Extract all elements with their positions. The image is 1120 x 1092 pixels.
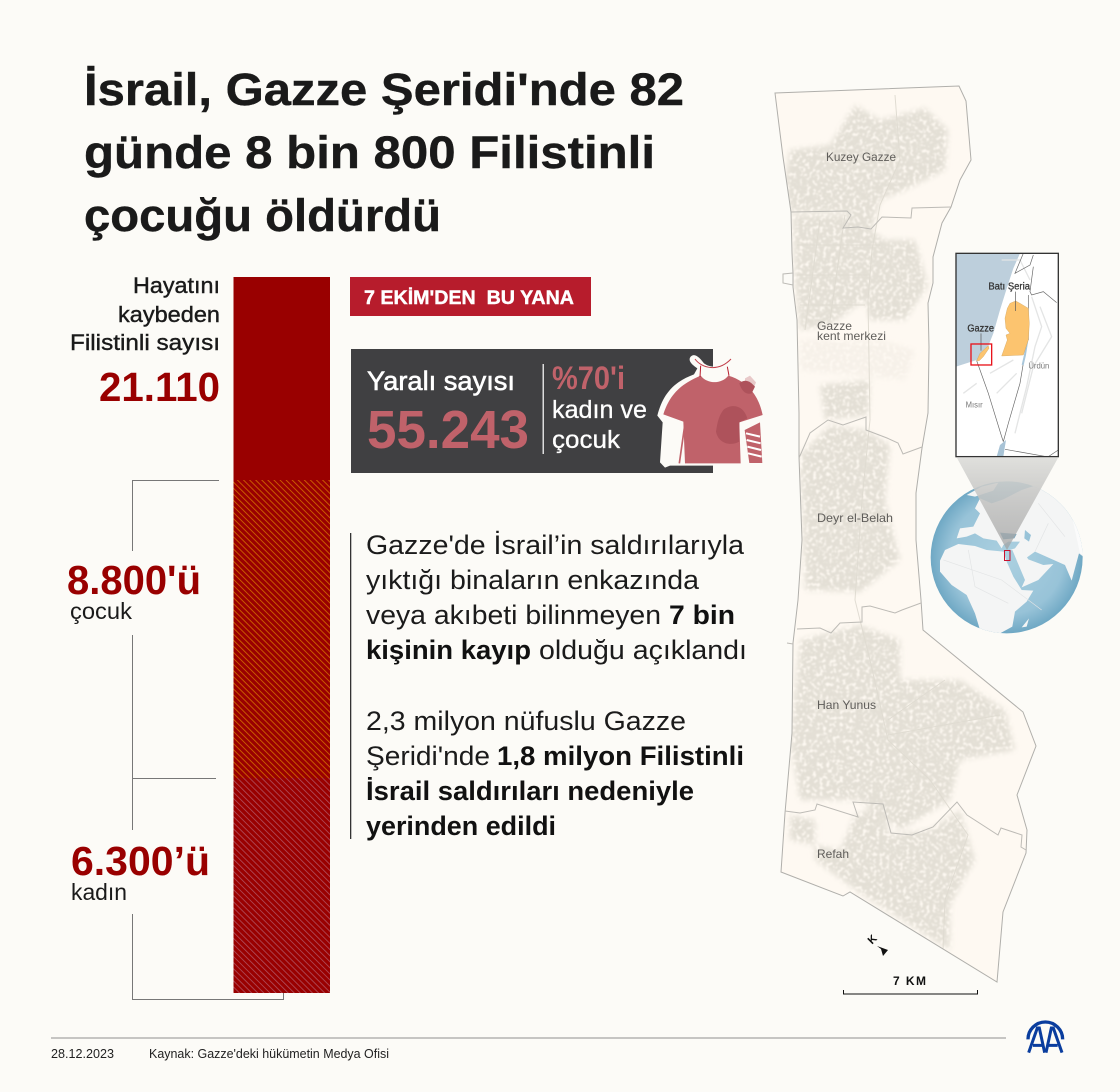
map: Gaza Strip: Han Yunus (817, 698, 876, 712)
children count (67, 557, 201, 624)
footer: 28.12.2023 (51, 1047, 114, 1061)
text block: missing and displaced: 1,8 milyon Filistinli (497, 741, 744, 771)
zoom cone (957, 458, 1058, 550)
icon: north arrow: K (866, 933, 880, 947)
icon: AA logo (1028, 1022, 1063, 1053)
map: Gaza Strip (775, 86, 1036, 982)
title: günde 8 bin 800 Filistinli (84, 127, 655, 178)
scale bar (844, 974, 978, 994)
women count: 6.300’ü (71, 838, 210, 884)
text block: missing and displaced: 7 bin (669, 600, 735, 630)
title (84, 64, 684, 241)
stacked bar chart (234, 277, 330, 993)
panel: wounded (351, 349, 713, 473)
bracket lines (132, 480, 284, 1000)
icon: bloodied shirt (657, 355, 765, 468)
children count: 8.800'ü (67, 557, 201, 603)
text block: missing and displaced (350, 529, 747, 841)
panel: wounded: Yaralı sayısı (367, 366, 515, 396)
inset map: Ürdün (1028, 360, 1049, 370)
text block: missing and displaced: yıktığı binaların enkazında (366, 565, 700, 595)
title: çocuğu öldürdü (84, 190, 441, 241)
map: Gaza Strip: Refah (817, 847, 849, 861)
women count (71, 838, 210, 905)
icon: north arrow (866, 933, 888, 956)
panel: wounded: %70'i (552, 360, 625, 396)
total deaths label: Hayatını (133, 273, 220, 298)
inset map (956, 253, 1058, 457)
inset map: Batı Şeria (988, 281, 1030, 292)
inset map: Gazze (967, 324, 994, 335)
map: Gaza Strip: Kuzey Gazze (826, 150, 896, 164)
text block: missing and displaced: yerinden edildi (366, 811, 556, 841)
panel: wounded: çocuk (552, 426, 621, 454)
text block: missing and displaced: Şeridi'nde (366, 741, 490, 771)
total deaths label (70, 273, 220, 355)
children count: çocuk (70, 598, 133, 624)
footer (51, 1038, 1006, 1061)
badge: since 7 October: 7 EKİM'DEN BU YANA (364, 288, 574, 309)
globe locator (931, 481, 1092, 633)
women count: kadın (71, 879, 127, 905)
footer: Kaynak: Gazze'deki hükümetin Medya Ofisi (149, 1047, 389, 1061)
badge: since 7 October (350, 277, 591, 316)
panel: wounded: kadın ve (552, 396, 647, 424)
scale bar: 7 KM (893, 974, 926, 988)
text block: missing and displaced: kişinin kayıp (366, 635, 531, 665)
total deaths label: kaybeden (118, 302, 220, 327)
map: Gaza Strip: kent merkezi (817, 329, 886, 343)
map: Gaza Strip: Deyr el-Belah (817, 511, 893, 525)
text block: missing and displaced: veya akıbeti bilinmeyen (366, 600, 661, 630)
map: Gaza Strip: Gazze (817, 319, 852, 333)
total deaths label: Filistinli sayısı (70, 330, 220, 355)
total deaths number: 21.110 (99, 364, 220, 410)
text block: missing and displaced: Gazze'de İsrail’in saldırılarıyla (366, 529, 745, 560)
icon: globe red marker (1004, 550, 1010, 560)
text block: missing and displaced: olduğu açıklandı (539, 635, 747, 665)
text block: missing and displaced: İsrail saldırıları nedeniyle (366, 776, 694, 806)
text block: missing and displaced: 2,3 milyon nüfuslu Gazze (366, 706, 686, 736)
panel: wounded: 55.243 (367, 400, 529, 460)
inset map: Mısır (966, 400, 983, 410)
title: İsrail, Gazze Şeridi'nde 82 (84, 64, 684, 115)
